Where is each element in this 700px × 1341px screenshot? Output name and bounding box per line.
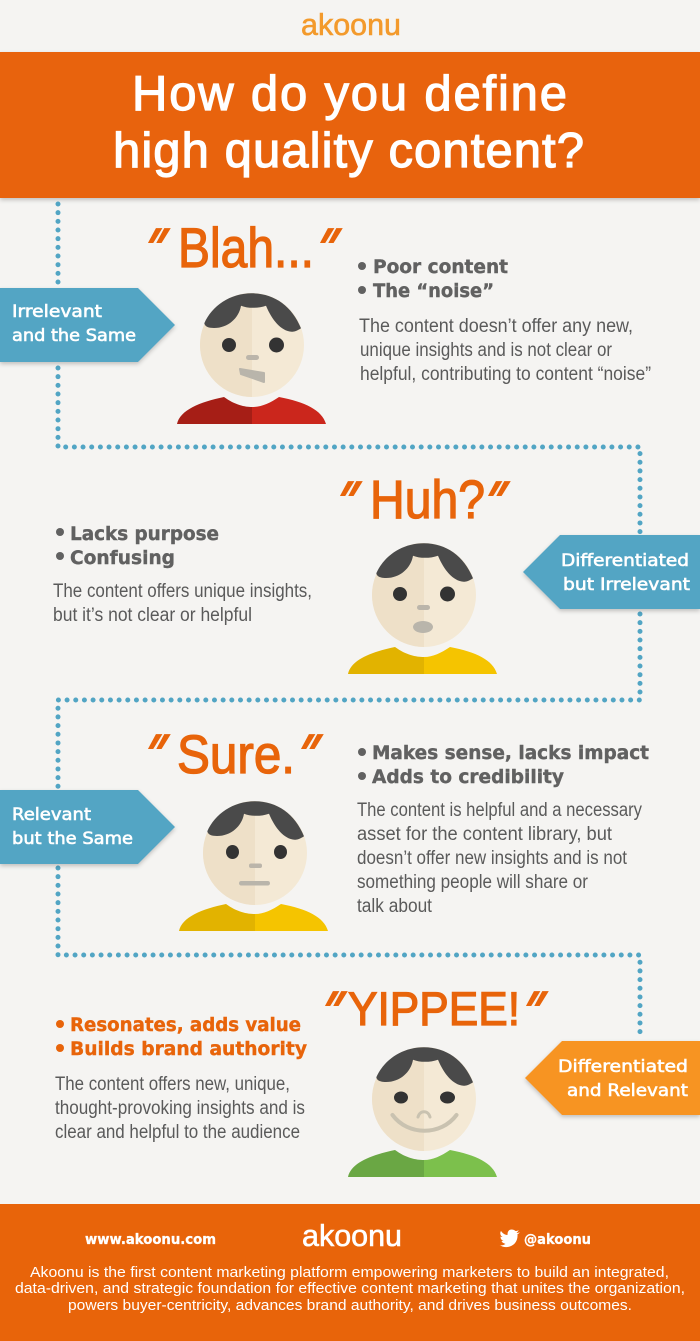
- panel: Sure: [0, 724, 649, 931]
- text block: Yippee description: [55, 1074, 305, 1143]
- banner: Differentiated but Irrelevant: but Irrelevant: [563, 575, 690, 595]
- heading: Huh: ": [317, 471, 371, 531]
- text block: Blah description: unique insights and is not clear or: [360, 340, 613, 361]
- banner: Irrelevant and the Same: Irrelevant: [12, 302, 102, 322]
- title banner: How do you define: [132, 67, 567, 121]
- bullets: Yippee: Builds brand authority: [70, 1038, 308, 1060]
- text block: Yippee description: The content offers new, unique,: [55, 1074, 290, 1095]
- panel: Yippee: [55, 981, 700, 1177]
- text block: Yippee description: clear and helpful to the audience: [55, 1122, 300, 1143]
- text block: Sure description: asset for the content library, but: [357, 824, 613, 845]
- heading: Sure: Sure.: [177, 725, 295, 785]
- dotted connector path: [58, 204, 640, 1040]
- panel: Huh: [53, 470, 700, 674]
- twitter handle: @akoonu: [524, 1232, 591, 1248]
- panel: Blah: [0, 216, 651, 424]
- heading: Blah: Blah...: [178, 216, 314, 279]
- text block: Huh description: The content offers unique insights,: [53, 581, 312, 602]
- heading: Sure: [125, 724, 332, 785]
- banner: Irrelevant and the Same: [0, 288, 175, 362]
- banner: Differentiated and Relevant: and Relevant: [567, 1081, 688, 1101]
- banner: Relevant but the Same: [0, 790, 175, 864]
- text block: Blah description: The content doesn’t offer any new,: [359, 316, 633, 337]
- icon: confused face: [348, 543, 497, 674]
- text block: Sure description: [357, 800, 642, 917]
- bullets: Sure: Adds to credibility: [372, 766, 565, 788]
- heading: Blah: ": [125, 218, 179, 278]
- bullets: Blah: [358, 256, 508, 302]
- logo: akoonu footer: akoonu: [302, 1218, 402, 1253]
- heading: Sure: ": [125, 724, 179, 784]
- website link: www.akoonu.com: [85, 1232, 216, 1248]
- text block: Sure description: something people will share or: [357, 872, 589, 893]
- heading: Yippee: YIPPEE!: [348, 982, 520, 1035]
- banner: Differentiated and Relevant: [525, 1041, 700, 1115]
- text block: Sure description: The content is helpful and a necessary: [357, 800, 642, 821]
- icon: bored face: [177, 293, 326, 424]
- icon: happy face: [348, 1047, 497, 1177]
- banner: Irrelevant and the Same: and the Same: [12, 326, 136, 346]
- text block: company description: Akoonu is the first content marketing platform empowering marketers to build an integrated,: [30, 1264, 669, 1281]
- icon: neutral face: [179, 801, 328, 931]
- heading: Huh: Huh?: [370, 470, 485, 530]
- bullets: Huh: Confusing: [70, 547, 175, 569]
- text block: Sure description: doesn’t offer new insights and is not: [357, 848, 628, 869]
- heading: Blah: ": [297, 218, 351, 278]
- bullets: Yippee: Resonates, adds value: [70, 1014, 301, 1036]
- text block: company description: powers buyer-centricity, advances brand authority, and drives business outcomes.: [68, 1297, 632, 1314]
- text block: Huh description: [53, 581, 312, 626]
- banner: Relevant but the Same: Relevant: [12, 805, 91, 825]
- text block: Yippee description: thought-provoking insights and is: [55, 1098, 305, 1119]
- banner: Differentiated and Relevant: Differentiated: [558, 1057, 688, 1077]
- heading: Sure: ": [278, 724, 332, 784]
- text block: Huh description: but it’s not clear or helpful: [53, 605, 252, 626]
- logo: akoonu header: akoonu: [301, 7, 401, 42]
- heading: Huh: ": [465, 471, 519, 531]
- heading: Huh: [317, 470, 519, 531]
- title banner: [0, 52, 700, 198]
- bullets: Huh: Lacks purpose: [70, 523, 219, 545]
- text block: Sure description: talk about: [357, 896, 433, 917]
- bullets: Blah: Poor content: [373, 256, 508, 278]
- banner: Differentiated but Irrelevant: Differentiated: [561, 551, 689, 571]
- text block: company description: [15, 1264, 685, 1314]
- heading: Yippee: [302, 981, 557, 1041]
- banner: Relevant but the Same: but the Same: [12, 829, 133, 849]
- text block: Blah description: helpful, contributing to content “noise”: [360, 364, 651, 385]
- banner: Differentiated but Irrelevant: [523, 535, 700, 609]
- text block: Blah description: [359, 316, 651, 385]
- footer: [0, 1204, 700, 1341]
- bullets: Huh: [56, 523, 219, 569]
- bullets: Sure: Makes sense, lacks impact: [372, 742, 649, 764]
- bullets: Yippee: [56, 1014, 308, 1060]
- heading: Yippee: ": [503, 981, 557, 1041]
- bullets: Blah: The “noise”: [373, 280, 494, 302]
- title banner: high quality content?: [113, 124, 584, 178]
- bullets: Sure: [358, 742, 649, 788]
- heading: Yippee: ": [302, 981, 356, 1041]
- text block: company description: data-driven, and strategic foundation for effective content marketing that unites the organization,: [15, 1280, 685, 1297]
- icon: bird: [500, 1230, 520, 1247]
